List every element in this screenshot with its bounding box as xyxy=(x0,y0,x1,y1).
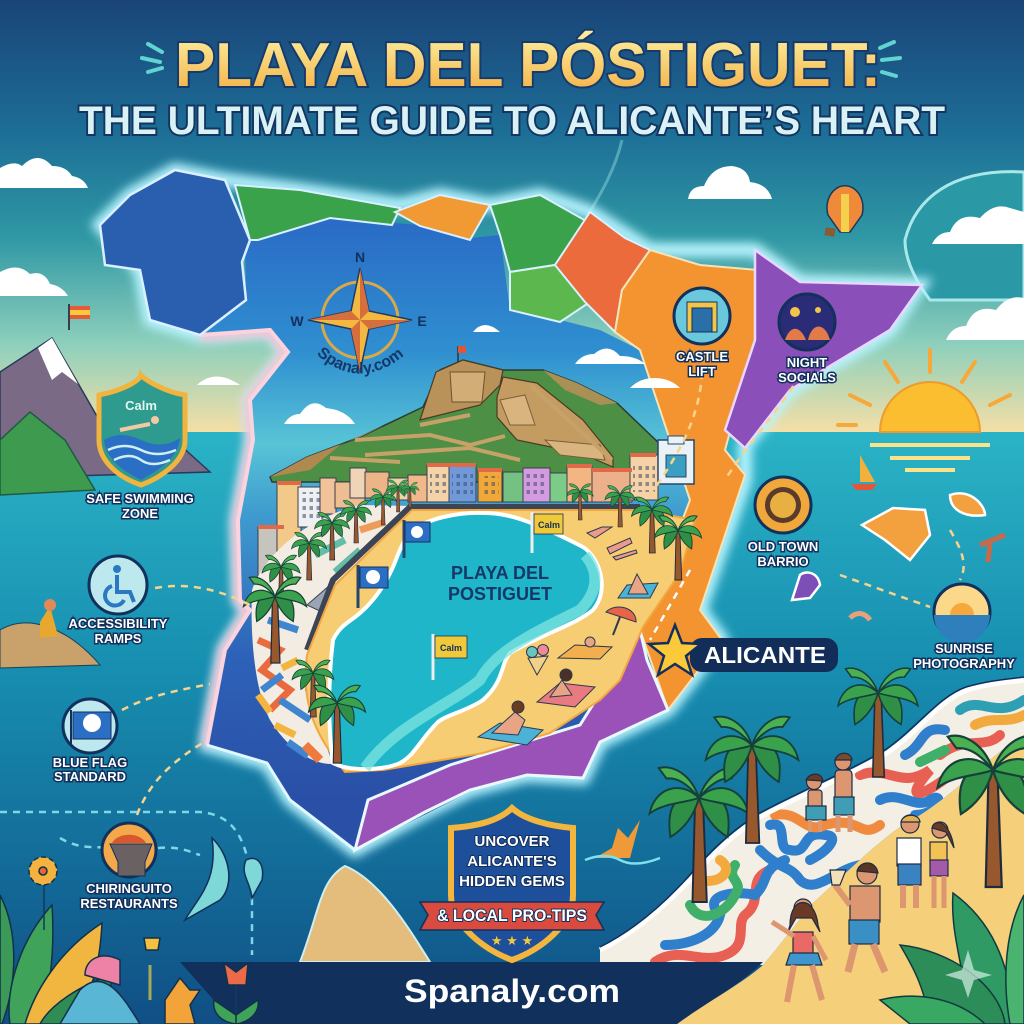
beach people xyxy=(772,753,954,1002)
region: lower green xyxy=(510,265,590,322)
shield: hidden gems: ★ ★ ★ xyxy=(491,933,533,948)
lift building xyxy=(658,436,694,484)
shield: calm swimming xyxy=(99,375,185,485)
label: chiringuito: CHIRINGUITO xyxy=(86,881,172,896)
region: catalonia purple xyxy=(725,250,922,448)
umbrella xyxy=(606,607,636,635)
compass rose xyxy=(290,249,427,377)
alicante label: ALICANTE xyxy=(704,642,826,668)
flag on islet xyxy=(68,304,90,330)
calm flags: Calm xyxy=(440,643,462,653)
label: safe swimming: SAFE SWIMMING xyxy=(86,491,194,506)
foliage bottom left xyxy=(0,857,258,1024)
castle hill xyxy=(270,346,663,482)
pink coast glow xyxy=(200,330,288,745)
banner xyxy=(180,962,763,1024)
foliage bottom right xyxy=(880,893,1024,1024)
background sky xyxy=(0,0,1024,432)
family xyxy=(806,753,854,832)
alicante label xyxy=(649,625,838,675)
lower coast stroke xyxy=(207,745,355,850)
big palms xyxy=(650,668,1024,902)
title flourishes xyxy=(142,42,900,76)
shield: hidden gems: HIDDEN GEMS xyxy=(459,873,565,890)
icon: old town barrio xyxy=(755,477,811,533)
blue flags xyxy=(358,520,430,608)
sun setting right xyxy=(838,350,1010,470)
label: night socials: NIGHT xyxy=(787,355,827,370)
background sea xyxy=(0,432,1024,1024)
shield: hidden gems: & LOCAL PRO-TIPS xyxy=(437,906,587,925)
label: old town: OLD TOWN xyxy=(748,539,818,554)
woman walking xyxy=(772,899,826,1002)
region: north green xyxy=(490,195,588,272)
compass rose: W xyxy=(290,313,304,329)
shield: hidden gems: UNCOVER xyxy=(474,833,550,850)
sailboat xyxy=(851,455,877,490)
beach sand xyxy=(306,510,695,772)
title: PLAYA DEL PÓSTIGUET: xyxy=(175,31,881,100)
compass rose: Spanaly.com xyxy=(318,348,404,377)
beach name label: PLAYA DEL xyxy=(451,563,549,583)
label: accessibility: RAMPS xyxy=(95,631,142,646)
icon: sunrise xyxy=(934,584,990,643)
stair ramp xyxy=(307,585,343,612)
map glow outline xyxy=(100,170,920,850)
shield: hidden gems xyxy=(420,808,604,960)
region: south purple xyxy=(355,630,668,850)
map clouds xyxy=(197,325,680,424)
balearic islands xyxy=(792,493,985,600)
coast stroke xyxy=(200,330,288,745)
label: castle lift: LIFT xyxy=(688,364,716,379)
icon: castle lift xyxy=(674,288,730,344)
beach name label: POSTIGUET xyxy=(448,584,552,604)
label: accessibility: ACCESSIBILITY xyxy=(69,616,168,631)
label: night socials: SOCIALS xyxy=(778,370,836,385)
region: cantabria orange xyxy=(395,195,490,240)
icon: blue flag xyxy=(63,699,117,753)
region: aragon orange xyxy=(615,250,758,710)
city buildings xyxy=(258,455,658,587)
shield: hidden gems: ALICANTE'S xyxy=(467,853,557,870)
promenade bottom right xyxy=(600,677,1024,965)
label: castle lift: CASTLE xyxy=(676,349,728,364)
islet with person xyxy=(0,599,100,668)
Spain map xyxy=(100,170,922,850)
dashed sea routes xyxy=(0,812,252,955)
label: chiringuito: RESTAURANTS xyxy=(80,896,178,911)
beach name label xyxy=(448,563,552,604)
banner: Spanaly.com xyxy=(404,973,620,1009)
label: sunrise: SUNRISE xyxy=(935,641,993,656)
calm flags xyxy=(433,512,563,680)
compass rose: E xyxy=(417,313,427,329)
label: blue flag: STANDARD xyxy=(54,769,126,784)
dashed route lines xyxy=(122,372,964,815)
label: blue flag: BLUE FLAG xyxy=(53,755,127,770)
bay water xyxy=(329,513,602,769)
palms on map xyxy=(243,480,702,763)
clouds xyxy=(0,158,1024,340)
man with drink xyxy=(830,863,885,972)
calm flags: Calm xyxy=(538,520,560,530)
small islands bottom xyxy=(185,838,263,920)
subtitle: THE ULTIMATE GUIDE TO ALICANTE’S HEART xyxy=(79,99,945,143)
region: red orange xyxy=(555,212,650,332)
bottom sand coast xyxy=(300,866,430,962)
swimmer and boat xyxy=(585,535,1005,864)
sunbathers xyxy=(478,527,658,745)
far coast line xyxy=(588,140,622,215)
promenade mosaic left xyxy=(252,505,415,764)
road along beach xyxy=(307,507,640,650)
couple xyxy=(897,815,954,908)
label: old town: BARRIO xyxy=(757,554,809,569)
region: asturias green xyxy=(235,185,400,240)
ice cream xyxy=(526,644,548,675)
icon: chiringuito xyxy=(102,823,156,877)
region: galicia xyxy=(100,170,250,335)
sand bottom right xyxy=(677,735,1024,1024)
label: safe swimming: ZONE xyxy=(122,506,158,521)
compass rose: N xyxy=(355,249,365,265)
mountains left xyxy=(0,338,210,495)
hot air balloon xyxy=(824,186,863,237)
far coast top right xyxy=(905,172,1024,300)
shield: calm swimming: Calm xyxy=(125,398,157,413)
region: central and west land xyxy=(200,218,700,850)
icon: accessibility ramps xyxy=(89,556,147,614)
label: sunrise: PHOTOGRAPHY xyxy=(913,656,1015,671)
icon: night socials xyxy=(779,294,835,350)
